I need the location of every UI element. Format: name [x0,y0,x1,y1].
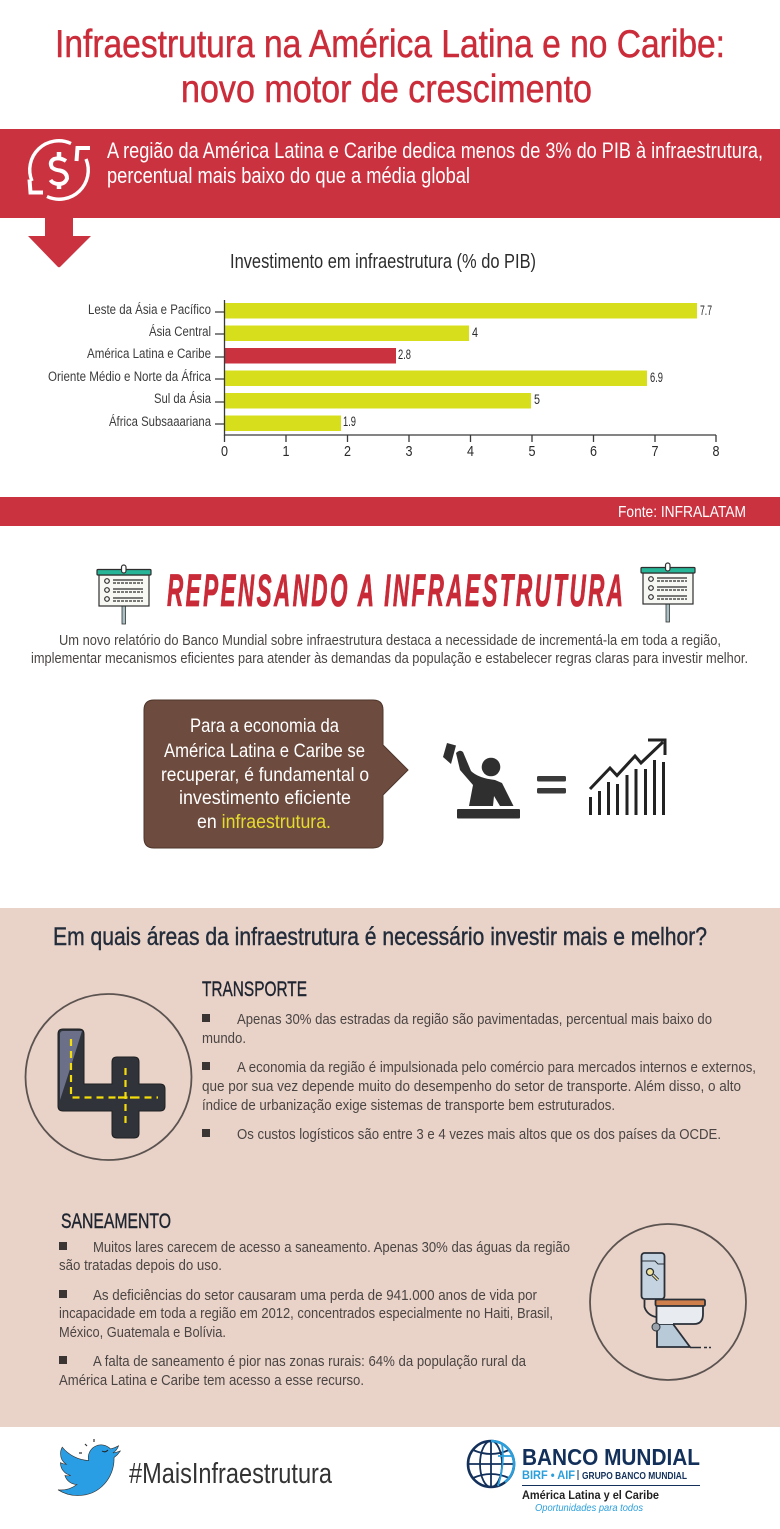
callout: speech box: en infraestrutura. [197,812,331,833]
axis numbers [221,443,720,460]
icon: growth chart [590,740,665,815]
value labels: 4 [472,325,478,340]
logo: Banco Mundial: Oportunidades para todos [535,1502,644,1514]
callout: speech box: recuperar, é fundamental o [161,765,369,786]
intro paragraph [31,632,748,667]
text: Saneamento: Muitos lares carecem de acesso a saneamento. Apenas 30% das águas da região [93,1239,570,1256]
text: Saneamento: México, Guatemala e Bolívia. [59,1324,226,1341]
icon: toilet [590,1224,746,1380]
bar chart [48,300,720,460]
value labels: 6.9 [650,370,663,385]
value labels [343,303,712,429]
title: novo motor de crescimento [181,68,592,111]
axis numbers: 5 [528,443,536,460]
heading: Repensando a infraestrutura: REPENSANDO A INFRAESTRUTURA [167,566,623,616]
text: Transporte: Apenas 30% das estradas da região são pavimentadas, percentual mais baixo do [237,1011,712,1028]
icon: globe [468,1441,514,1487]
icon: worker with hammer [443,743,520,818]
value labels: 1.9 [343,414,356,429]
logo: Banco Mundial: América Latina y el Caribe [522,1488,659,1502]
callout: speech box [144,700,408,848]
hashtag: #MaisInfraestrutura [129,1458,333,1490]
source band: Fonte: INFRALATAM [618,504,746,521]
text: Saneamento: SANEAMENTO [61,1210,171,1233]
icon: presentation board left [97,565,151,624]
callout: speech box: América Latina e Caribe se [164,741,365,762]
text: Saneamento: As deficiências do setor causaram uma perda de 941.000 anos de vida por [93,1287,537,1304]
category labels [48,302,211,429]
banner text [107,138,763,188]
axis numbers: 1 [282,443,290,460]
category labels: Oriente Médio e Norte da África [48,369,211,384]
banner background [0,129,780,218]
icon: down arrow [28,218,91,267]
axis numbers: 7 [652,443,658,460]
source band [0,497,780,526]
panel background [0,908,780,1427]
text: Transporte: mundo. [202,1030,246,1047]
text: Saneamento: incapacidade em toda a região em 2012, concentrados especialmente no Haiti, Brasil, [59,1305,553,1322]
text: Saneamento [59,1210,570,1389]
icon: road [26,994,192,1160]
logo: Banco Mundial: GRUPO BANCO MUNDIAL [582,1471,687,1482]
icon: Twitter bird [58,1439,120,1496]
text: Transporte: TRANSPORTE [202,978,307,1001]
icon: presentation board right [641,563,695,622]
axis numbers: 8 [712,443,720,460]
chart title: Investimento em infraestrutura (% do PIB) [230,251,536,273]
axis numbers: 6 [590,443,597,460]
icon: equals sign [537,776,566,794]
axes [215,300,716,442]
logo: Banco Mundial: BIRF • AIF [522,1468,575,1482]
icon: dollar with circular arrows [30,141,90,199]
title [55,23,725,111]
callout: speech box: Para a economia da [190,716,339,737]
callout: speech box: investimento eficiente [179,788,351,809]
category labels: América Latina e Caribe [87,346,211,361]
panel: red banner with down arrow [0,129,780,267]
axis numbers: 3 [406,443,412,460]
axis numbers: 4 [467,443,474,460]
value labels: 2.8 [398,347,411,362]
logo: Banco Mundial [468,1441,700,1514]
text: Saneamento: A falta de saneamento é pior nas zonas rurais: 64% da população rural da [93,1353,527,1370]
text: Transporte: Os custos logísticos são entre 3 e 4 vezes mais altos que os dos países da OCDE. [237,1126,721,1143]
category labels: Leste da Ásia e Pacífico [88,302,211,317]
text: Transporte [202,978,756,1143]
text: Transporte: índice de urbanização exige sistemas de transporte bem estruturados. [202,1097,615,1114]
value labels: 5 [534,392,540,407]
value labels: 7.7 [700,303,712,318]
panel: investment areas [0,908,780,1427]
bars [225,303,697,431]
text: Saneamento: América Latina e Caribe tem acesso a esse recurso. [59,1372,364,1389]
category labels: Sul da Ásia [154,391,211,406]
category labels: África Subsaaariana [109,414,211,429]
text: Saneamento: são tratadas depois do uso. [59,1257,222,1274]
axis numbers: 0 [221,443,228,460]
banner text: percentual mais baixo do que a média global [107,163,470,188]
category labels: Ásia Central [149,324,211,339]
axis numbers: 2 [344,443,351,460]
logo: Banco Mundial: BANCO MUNDIAL [522,1444,700,1470]
